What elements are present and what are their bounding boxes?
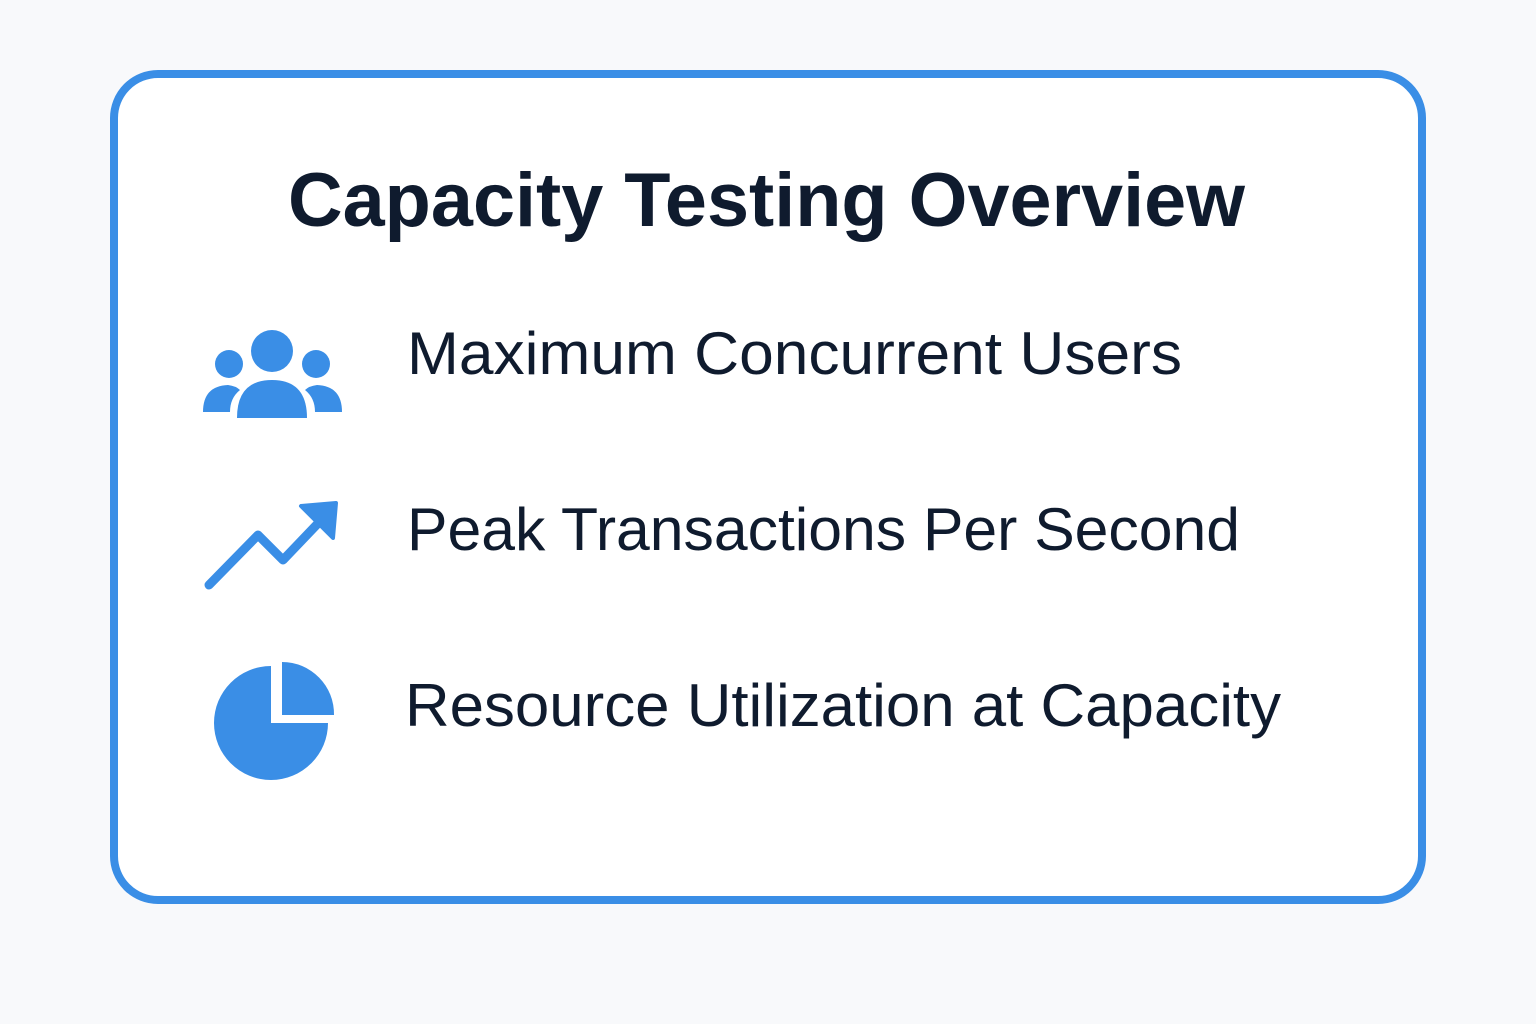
text: maximum concurrent users: Maximum Concurrent Users — [407, 320, 1182, 387]
icon: trend arrow — [209, 503, 336, 585]
panel: card — [114, 74, 1422, 900]
title: Capacity Testing Overview — [288, 158, 1246, 243]
text: peak transactions per second: Peak Transactions Per Second — [407, 496, 1240, 563]
text: resource utilization at capacity: Resource Utilization at Capacity — [405, 672, 1281, 739]
icon: users — [203, 330, 342, 418]
icon: pie chart — [214, 662, 334, 780]
